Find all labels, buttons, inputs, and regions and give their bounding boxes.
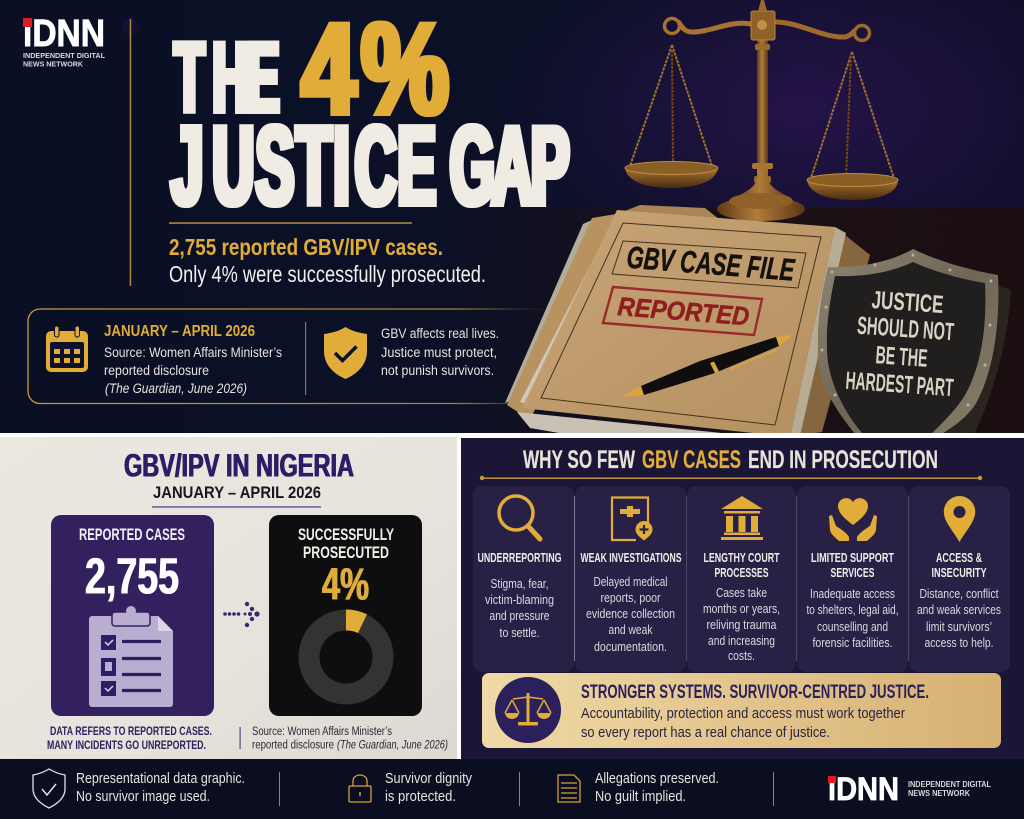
card: successfully prosecuted [269,515,422,716]
column: access and insecurity: INSECURITY [932,565,987,580]
title rule [169,222,412,224]
column: underreporting: victim-blaming [485,593,554,607]
column: lengthy court processes: reliving trauma [706,618,777,632]
column: underreporting: and pressure [490,609,550,623]
column: limited support services: to shelters, legal aid, [806,603,898,617]
footer note: representational [76,771,245,805]
column: access and insecurity: limit survivors’ [926,620,992,634]
column: lengthy court processes: costs. [728,649,755,663]
column: access and insecurity: access to help. [924,636,994,650]
footer note: representational: No survivor image used. [76,789,210,805]
title [168,20,570,208]
date and source text [104,323,282,396]
column: weak investigations: reports, poor [600,591,660,605]
footer note: dignity [385,771,473,805]
column: lengthy court processes: LENGTHY COURT [704,550,780,565]
card: reported cases [51,515,214,716]
column: lengthy court processes: Cases take [716,586,767,600]
column: weak investigations: evidence collection [586,607,675,621]
column: underreporting: to settle. [500,626,540,640]
heading: why so few: GBV CASES [642,446,741,474]
footer note: allegations: No guilt implied. [595,789,686,805]
footer note: dignity: Survivor dignity [385,771,473,787]
case file label: GBV CASE FILE [625,240,797,288]
column: access and insecurity: ACCESS & [936,550,982,565]
icon: clipboard checklist [89,606,173,707]
date and source text: JANUARY – APRIL 2026 [104,323,255,340]
arrow: dotted [223,602,260,627]
illustration: scales of justice [625,0,898,221]
card: successfully prosecuted: 4% [322,558,369,610]
heading: GBV/IPV in Nigeria [124,448,354,508]
illustration: shield [818,249,1011,440]
date and source text: reported disclosure [104,363,209,378]
survivors message: Justice must protect, [381,345,497,360]
note: reported cases caveat: MANY INCIDENTS GO UNREPORTED. [47,738,206,752]
card: reported cases: REPORTED CASES [79,525,185,544]
date and source text: (The Guardian, June 2026) [105,381,247,396]
column: access and insecurity [909,486,1010,672]
icon: shield outline [33,769,65,808]
column: weak investigations [575,486,686,672]
pen [620,335,793,397]
footer note: representational: Representational data graphic. [76,771,245,787]
heading: why so few: WHY SO FEW [523,446,635,474]
shield text: BE THE [875,341,928,373]
column: weak investigations: WEAK INVESTIGATIONS [580,550,682,565]
card: successfully prosecuted: PROSECUTED [303,543,389,562]
column: underreporting: Stigma, fear, [490,577,548,591]
survivors message: GBV affects real lives. [381,326,499,341]
column: weak investigations: Delayed medical [594,575,668,589]
icon: scales in circle [495,677,561,743]
icon: location pin [944,496,975,542]
column: underreporting: UNDERREPORTING [478,550,562,565]
panel: footer bar [0,759,1024,819]
card: successfully prosecuted: SUCCESSFULLY [298,525,394,544]
column: lengthy court processes [687,486,796,672]
shield text [846,291,954,396]
source note: Source: Women Affairs Minister’s [252,726,392,738]
panel: GBV/IPV in Nigeria [0,437,457,759]
title: 4% [301,0,449,142]
case file label [612,240,806,288]
logo: iDNN footer: NEWS NETWORK [908,789,970,798]
shield text: SHOULD NOT [856,312,955,346]
callout: stronger systems [482,673,1001,748]
source note [252,726,448,752]
subtitle [169,234,486,287]
card: reported cases: 2,755 [85,548,179,604]
shield text: JUSTICE [871,286,944,319]
source note: reported disclosure [252,740,334,752]
heading: GBV/IPV in Nigeria: JANUARY – APRIL 2026 [153,483,321,502]
logo: iDNN top: NEWS NETWORK [23,60,84,68]
donut chart: 4% [309,609,383,694]
column: limited support services: LIMITED SUPPORT [811,550,894,565]
icon: magnifier [499,496,540,539]
reported stamp: REPORTED [617,291,751,331]
column: access and insecurity: Distance, conflict [920,587,999,601]
column: weak investigations: and weak [608,623,653,637]
logo: iDNN footer: INDEPENDENT DIGITAL [908,780,991,789]
column: lengthy court processes: PROCESSES [714,565,769,580]
note: reported cases caveat: DATA REFERS TO REPORTED CASES. [50,724,212,738]
footer note: allegations: Allegations preserved. [595,771,719,787]
source note: (The Guardian, June 2026) [337,740,448,752]
survivors message: not punish survivors. [381,363,494,378]
column: lengthy court processes: months or years, [703,602,780,616]
illustration: stacked case folders [505,205,870,440]
icon: calendar [46,326,88,372]
icon: padlock [349,775,371,802]
title: THE [174,22,280,133]
survivors message [381,326,499,378]
icon: shield check [324,327,367,379]
subtitle: 2,755 reported GBV/IPV cases. [169,234,443,260]
footer note: dignity: is protected. [385,789,456,805]
column: underreporting [473,486,574,672]
panel: why so few cases [461,438,1024,759]
date and source text: Source: Women Affairs Minister’s [104,345,282,360]
note: reported cases caveat [47,724,212,752]
column: limited support services: SERVICES [830,565,875,580]
subtitle: Only 4% were successfully prosecuted. [169,261,486,287]
icon: courthouse [721,496,763,540]
icon: hands and heart [829,498,877,541]
icon: document [558,775,580,802]
callout: stronger systems: Accountability, protection and access must work together [581,706,905,722]
column: limited support services: forensic facilities. [812,636,892,650]
panel: header hero [0,0,1024,440]
heading: why so few: END IN PROSECUTION [748,446,938,474]
logo: iDNN footer: iDNN [828,771,899,807]
column: access and insecurity: and weak services [917,603,1001,617]
heading: why so few [480,446,982,480]
column: limited support services: Inadequate access [810,587,895,601]
heading: GBV/IPV in Nigeria: GBV/IPV IN NIGERIA [124,448,354,484]
logo: iDNN top: iDNN [23,13,105,55]
callout: stronger systems: so every report has a real chance of justice. [581,725,830,741]
logo: iDNN top [23,18,105,66]
logo: iDNN footer [828,771,991,807]
column: lengthy court processes: and increasing [708,634,775,648]
column: limited support services: counselling and [817,620,888,634]
logo: iDNN top: INDEPENDENT DIGITAL [23,51,105,60]
panel: date and source box [28,309,548,404]
column: limited support services [797,486,908,672]
title: JUSTICE GAP [171,104,569,228]
column: weak investigations: documentation. [594,640,667,654]
header vertical rule [120,14,142,286]
footer note: allegations [595,771,719,805]
icon: medical document [612,498,652,540]
